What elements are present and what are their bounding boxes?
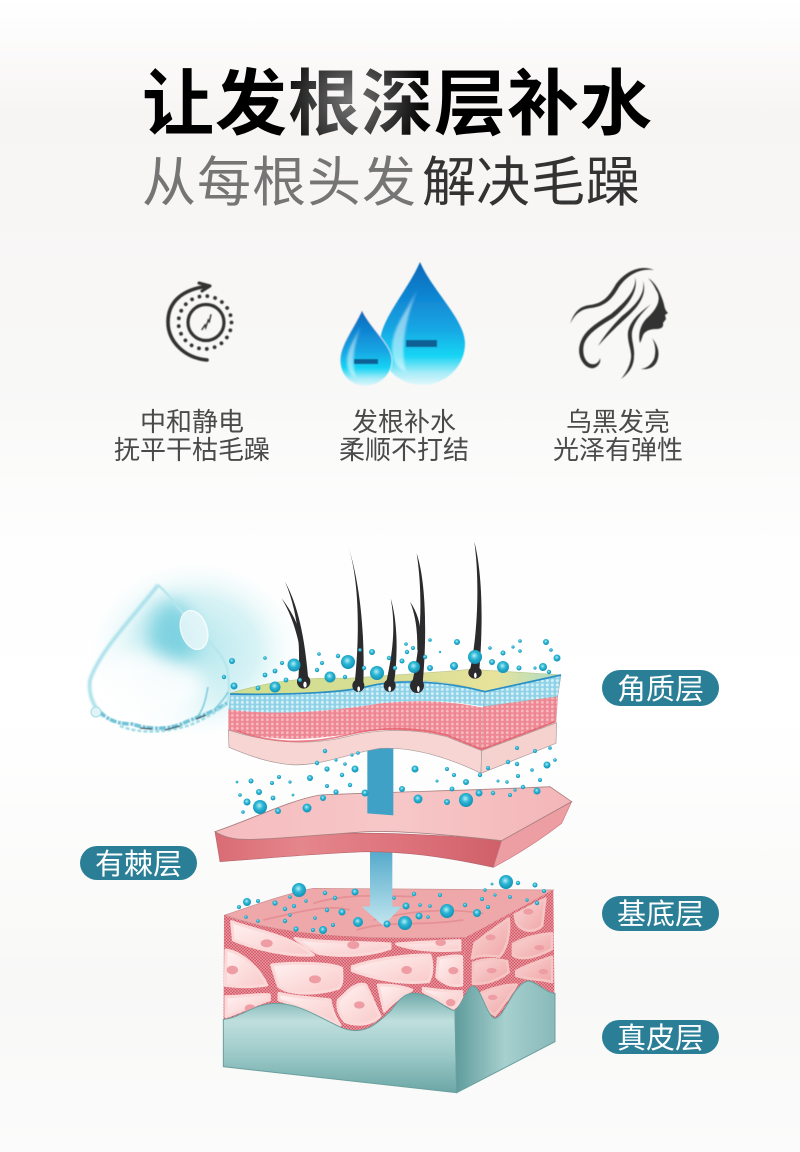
subtitle: 从每根头发: [142, 153, 416, 213]
text: neutralise static: [114, 407, 270, 465]
text: root hydration: [339, 407, 469, 465]
small droplet on edge: [175, 607, 213, 653]
basal cells: [225, 922, 462, 1025]
skin layer: spinous: [215, 743, 572, 867]
label: basal layer: [602, 896, 719, 931]
text: root hydration: 柔顺不打结: [339, 435, 469, 465]
label: dermis: [602, 1020, 719, 1055]
skin layer: stratum corneum: [228, 669, 561, 773]
bubbles at surface: [222, 638, 561, 692]
label: spinous layer: [80, 846, 197, 881]
label: spinous layer: 有棘层: [95, 848, 182, 881]
subtitle: 解决毛躁: [422, 153, 640, 213]
bubbles on basal layer: [237, 875, 546, 934]
icon: static neutralise: [168, 283, 232, 360]
basal side tissue: [457, 890, 555, 1093]
upper arrow: [367, 743, 393, 815]
water droplet with glow: [90, 562, 300, 738]
basal front tissue: [223, 915, 466, 1093]
label: dermis: 真皮层: [617, 1022, 704, 1055]
dermis front: [223, 993, 457, 1093]
basal nuclei: [227, 909, 548, 1012]
text: dark shine: 光泽有弹性: [553, 435, 683, 465]
text: neutralise static: 中和静电: [140, 407, 244, 437]
basal top surface: [225, 888, 553, 938]
lower arrow: [362, 852, 402, 926]
text: root hydration: 发根补水: [352, 407, 456, 437]
icon: hair silhouette: [570, 268, 668, 379]
title: 让发根深层补水: [142, 65, 652, 145]
icon: water drops: [340, 262, 465, 386]
text: dark shine: [553, 407, 683, 465]
text: dark shine: 乌黑发亮: [566, 407, 670, 437]
water splash: [100, 687, 228, 732]
water molecule bubbles: [222, 638, 561, 934]
skin layer: basal cube: [223, 852, 555, 1093]
label: stratum corneum: 角质层: [617, 673, 704, 706]
bubbles between layers: [236, 746, 557, 814]
subtitle: [142, 153, 640, 213]
label: stratum corneum: [602, 670, 719, 706]
text: neutralise static: 抚平干枯毛躁: [114, 435, 270, 465]
dermis side: [455, 981, 555, 1093]
hair follicles: [282, 542, 482, 693]
label: basal layer: 基底层: [617, 898, 704, 931]
